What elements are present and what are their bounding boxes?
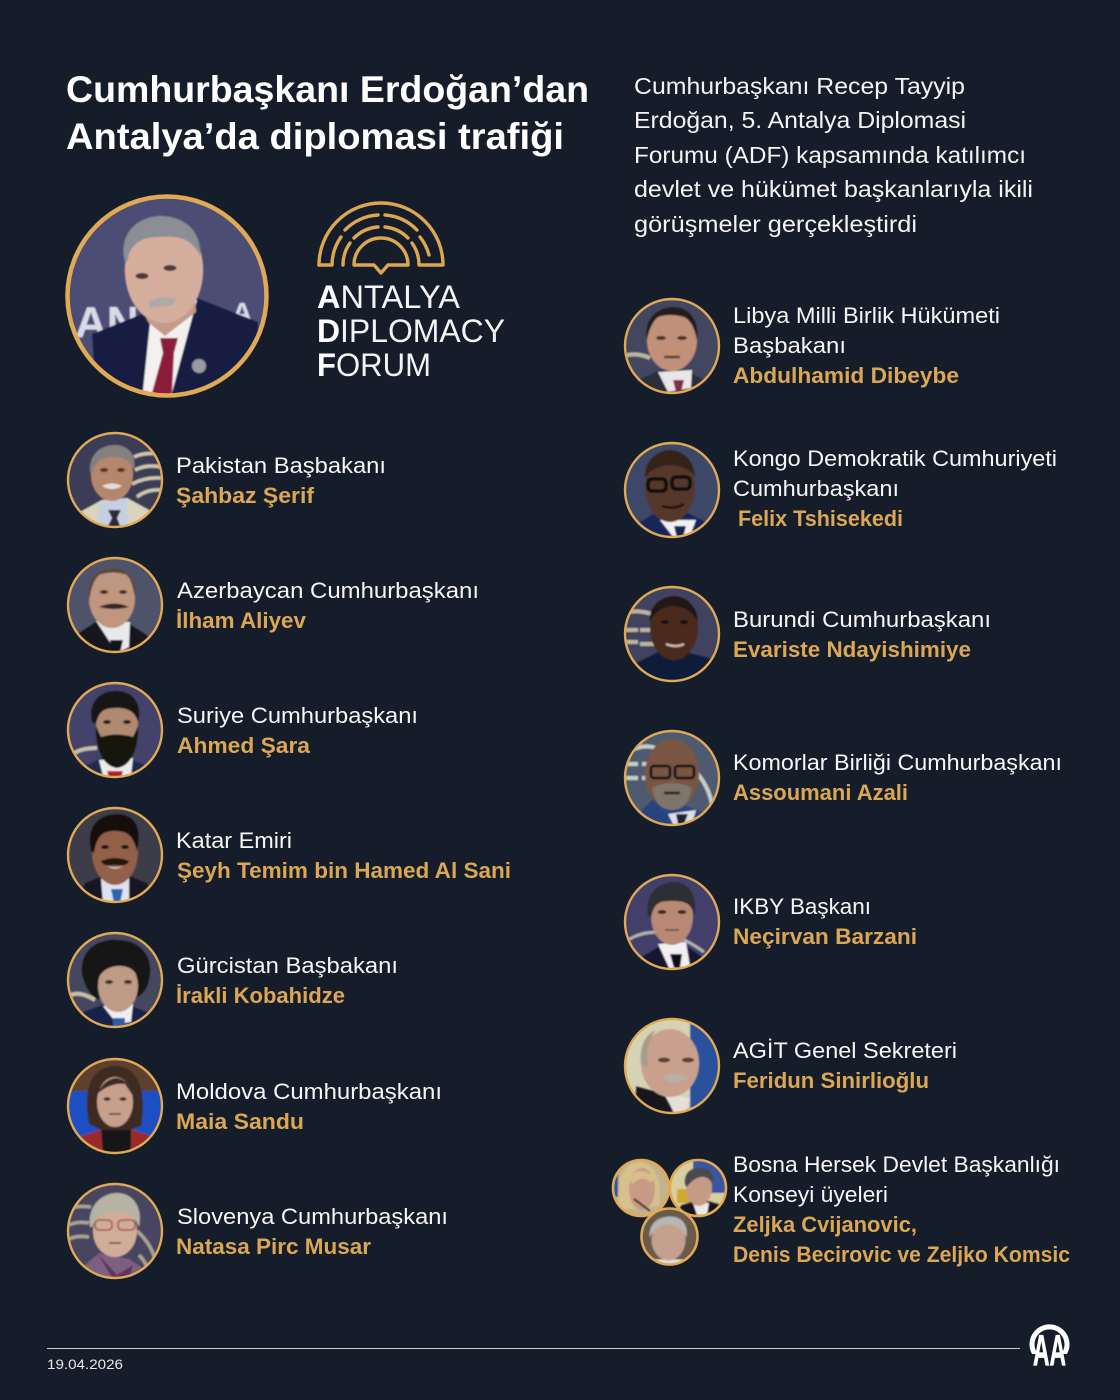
label: Katar Emiri bbox=[176, 828, 292, 853]
label: Slovenya Cumhurbaşkanı bbox=[177, 1204, 448, 1229]
logo wordmark: ANTALYA bbox=[317, 279, 461, 315]
portrait: Cvijanovic bbox=[612, 1159, 670, 1217]
date: 19.04.2026 bbox=[47, 1356, 123, 1372]
leader: Qatar bbox=[67, 807, 511, 903]
label: Denis Becirovic ve Zeljko Komsic bbox=[733, 1242, 1070, 1267]
portrait bbox=[67, 432, 163, 528]
label: Bosna Hersek Devlet Başkanlığı bbox=[733, 1152, 1060, 1177]
label: Konseyi üyeleri bbox=[733, 1182, 888, 1207]
label: Azerbaycan Cumhurbaşkanı bbox=[177, 578, 479, 603]
label bbox=[733, 750, 1062, 805]
leader: Bosnia presidency bbox=[612, 1152, 1070, 1267]
label bbox=[176, 1204, 448, 1259]
label bbox=[733, 1038, 957, 1093]
label bbox=[733, 894, 917, 949]
intro text bbox=[634, 73, 1033, 237]
leader: Syria bbox=[67, 682, 418, 778]
logo wordmark: DIPLOMACY bbox=[317, 313, 505, 349]
label: Cumhurbaşkanı bbox=[733, 476, 899, 501]
label bbox=[176, 1079, 442, 1134]
leader: Slovenia bbox=[67, 1183, 448, 1279]
title bbox=[66, 69, 589, 157]
leader: DR Congo bbox=[624, 442, 1057, 538]
label: AGİT Genel Sekreteri bbox=[733, 1038, 957, 1063]
label: İlham Aliyev bbox=[176, 608, 306, 633]
label bbox=[176, 453, 386, 508]
label: Assoumani Azali bbox=[733, 780, 908, 805]
leader: Libya bbox=[624, 298, 1000, 394]
logo wordmark bbox=[317, 279, 505, 383]
portrait bbox=[67, 682, 163, 778]
label: Ahmed Şara bbox=[177, 733, 310, 758]
label: Felix Tshisekedi bbox=[738, 506, 903, 531]
portrait bbox=[67, 932, 163, 1028]
label: Pakistan Başbakanı bbox=[176, 453, 386, 478]
portrait bbox=[624, 298, 720, 394]
portrait bbox=[67, 807, 163, 903]
label: Zeljka Cvijanovic, bbox=[733, 1212, 917, 1237]
label bbox=[733, 303, 1000, 388]
portrait bbox=[624, 442, 720, 538]
leader: Comoros bbox=[624, 730, 1062, 826]
label bbox=[733, 1152, 1070, 1267]
label bbox=[177, 703, 418, 758]
label: Neçirvan Barzani bbox=[733, 924, 917, 949]
intro text: görüşmeler gerçekleştirdi bbox=[634, 211, 917, 237]
intro text: Erdoğan, 5. Antalya Diplomasi bbox=[634, 107, 966, 133]
footer bbox=[47, 1324, 1070, 1375]
leader: OSCE bbox=[624, 1018, 957, 1114]
title: Cumhurbaşkanı Erdoğan’dan bbox=[66, 69, 589, 110]
label bbox=[176, 578, 479, 633]
title: Antalya’da diplomasi trafiği bbox=[66, 116, 564, 157]
leader: Pakistan bbox=[67, 432, 386, 528]
portrait bbox=[624, 1018, 720, 1114]
label: Başbakanı bbox=[733, 333, 846, 358]
leader: Georgia bbox=[67, 932, 398, 1028]
label bbox=[176, 828, 511, 883]
portrait: Becirovic bbox=[669, 1159, 727, 1217]
intro text: Cumhurbaşkanı Recep Tayyip bbox=[634, 73, 965, 99]
label: Maia Sandu bbox=[176, 1109, 304, 1134]
logo: Antalya Diplomacy Forum bbox=[317, 203, 505, 383]
leader: Burundi bbox=[624, 586, 991, 682]
label: Suriye Cumhurbaşkanı bbox=[177, 703, 418, 728]
portrait bbox=[67, 1058, 163, 1154]
intro text: Forumu (ADF) kapsamında katılımcı bbox=[634, 142, 1026, 168]
label: Moldova Cumhurbaşkanı bbox=[176, 1079, 442, 1104]
portrait: Komsic bbox=[640, 1208, 698, 1266]
label: Komorlar Birliği Cumhurbaşkanı bbox=[733, 750, 1062, 775]
leader: KRG bbox=[624, 874, 917, 970]
leader: Moldova bbox=[67, 1058, 442, 1154]
label: Abdulhamid Dibeybe bbox=[733, 363, 959, 388]
portrait bbox=[67, 1183, 163, 1279]
portrait bbox=[67, 557, 163, 653]
portrait: Erdoğan bbox=[66, 195, 268, 400]
logo wordmark: FORUM bbox=[317, 347, 431, 383]
intro text: devlet ve hükümet başkanlarıyla ikili bbox=[634, 176, 1033, 202]
label: Libya Milli Birlik Hükümeti bbox=[733, 303, 1000, 328]
label: İrakli Kobahidze bbox=[176, 983, 345, 1008]
label: Natasa Pirc Musar bbox=[176, 1234, 371, 1259]
label bbox=[176, 953, 398, 1008]
label: IKBY Başkanı bbox=[733, 894, 871, 919]
portrait: Erdoğan: A bbox=[232, 297, 252, 328]
logo: AA bbox=[1030, 1324, 1070, 1375]
label: Feridun Sinirlioğlu bbox=[733, 1068, 929, 1093]
label: Kongo Demokratik Cumhuriyeti bbox=[733, 446, 1057, 471]
portrait bbox=[624, 874, 720, 970]
label: Şahbaz Şerif bbox=[176, 483, 315, 508]
label: Şeyh Temim bin Hamed Al Sani bbox=[177, 858, 511, 883]
portrait bbox=[624, 730, 720, 826]
logo emblem bbox=[319, 203, 443, 273]
label: Gürcistan Başbakanı bbox=[177, 953, 398, 978]
label: Evariste Ndayishimiye bbox=[733, 637, 971, 662]
logo: AA: AA bbox=[1033, 1326, 1066, 1375]
portrait bbox=[624, 586, 720, 682]
label: Burundi Cumhurbaşkanı bbox=[733, 607, 991, 632]
portrait: Erdoğan: AN bbox=[75, 298, 139, 347]
label bbox=[733, 446, 1057, 531]
leader: Azerbaijan bbox=[67, 557, 479, 653]
label bbox=[733, 607, 991, 662]
